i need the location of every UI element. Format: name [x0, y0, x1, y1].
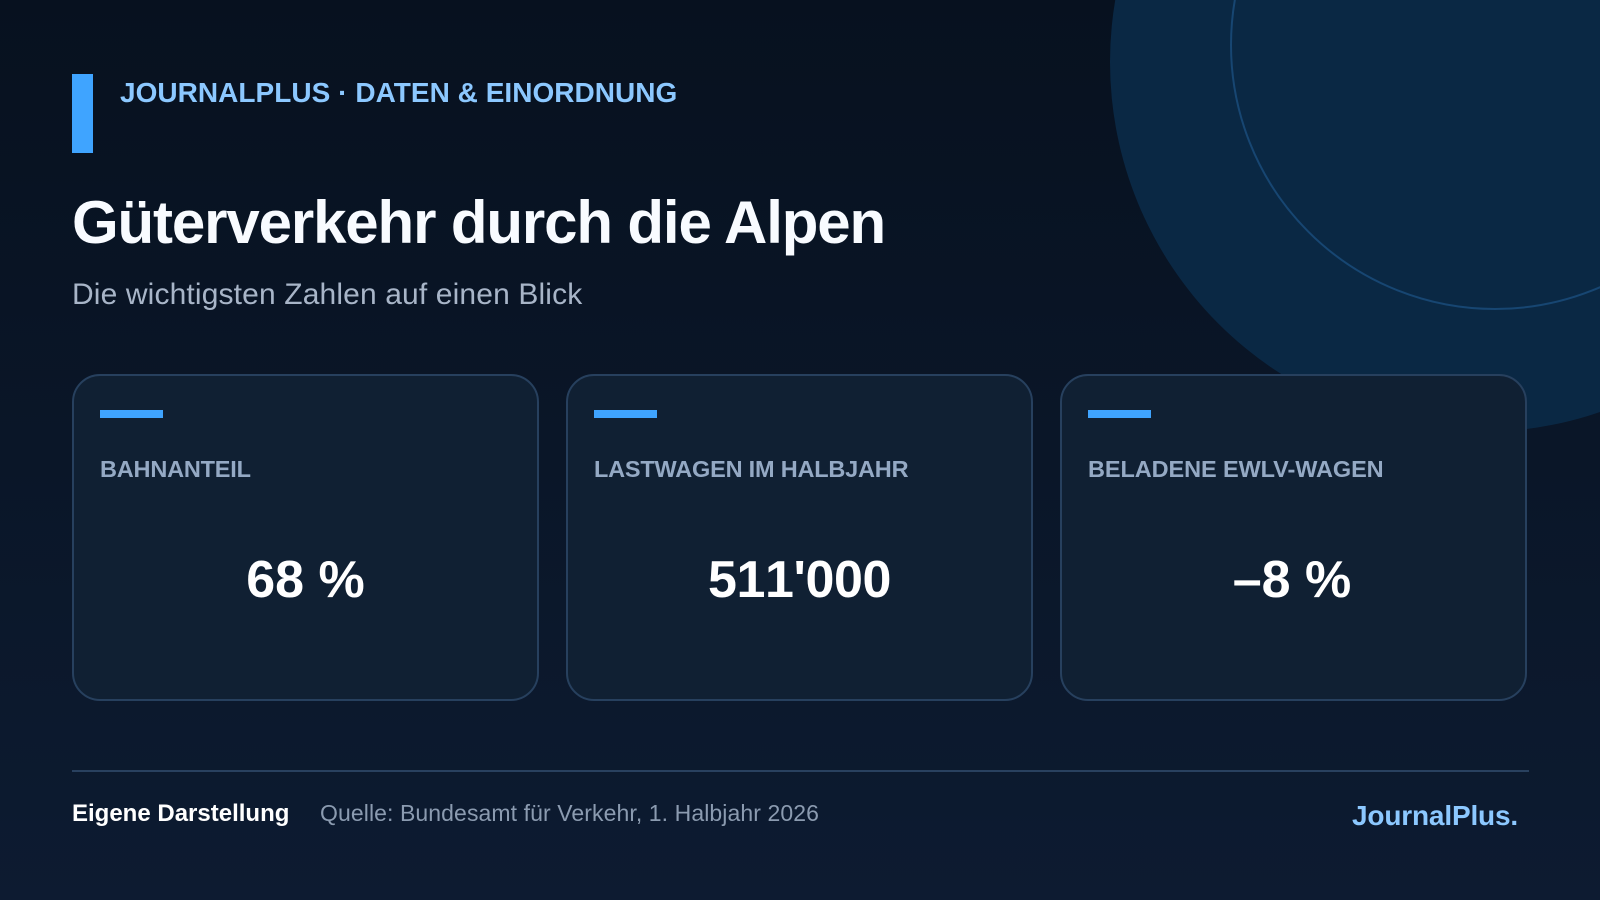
card value: –8 %	[1233, 551, 1351, 609]
title: Güterverkehr durch die Alpen	[72, 189, 885, 256]
subtitle: Die wichtigsten Zahlen auf einen Blick	[72, 278, 582, 311]
card accent	[1088, 410, 1151, 418]
accent bar	[72, 74, 93, 153]
card label: BAHNANTEIL	[100, 456, 251, 482]
brand mark: JournalPlus.	[1352, 800, 1518, 831]
footer source: Quelle: Bundesamt für Verkehr, 1. Halbjahr 2026	[320, 800, 819, 826]
panel: Lastwagen im Halbjahr	[566, 374, 1033, 701]
eyebrow: JOURNALPLUS · DATEN & EINORDNUNG	[120, 77, 677, 108]
panel: Bahnanteil	[72, 374, 539, 701]
panel: Beladene EWLV-Wagen	[1060, 374, 1527, 701]
card accent	[594, 410, 657, 418]
decorative large circle	[1110, 0, 1600, 432]
decorative ring	[1230, 0, 1600, 310]
footer credit: Eigene Darstellung	[72, 800, 289, 827]
card label: BELADENE EWLV-WAGEN	[1088, 456, 1384, 482]
card value: 68 %	[246, 551, 365, 609]
card label: LASTWAGEN IM HALBJAHR	[594, 456, 908, 482]
card value: 511'000	[708, 551, 891, 609]
card accent	[100, 410, 163, 418]
